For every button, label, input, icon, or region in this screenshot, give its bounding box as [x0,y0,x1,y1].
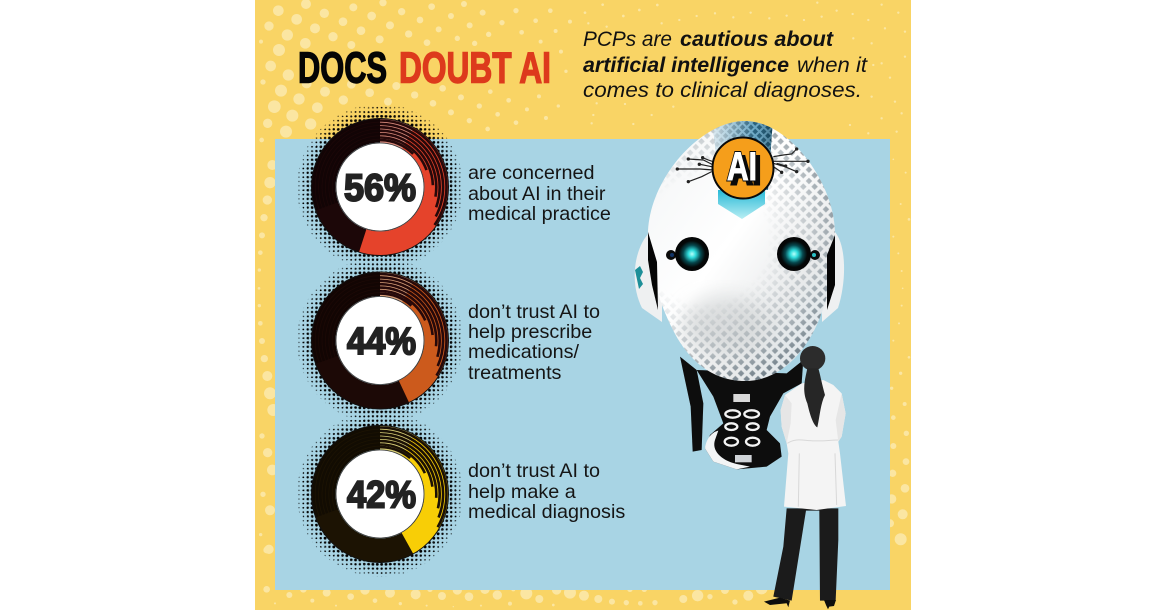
donut chart: 56%: 56% [344,168,416,210]
icon: AI circuit badge [676,138,810,198]
donut chart: 42% [295,409,465,579]
donut chart: 44% [295,255,465,426]
caption: 44%: medications/ [468,341,580,363]
caption: 56%: about AI in their [468,183,606,205]
icon: AI circuit badge: AI [731,149,761,193]
blue content panel [275,139,890,590]
illustration: robot head [640,115,840,385]
subtitle text block: when it [797,53,868,77]
subtitle text block: PCPs are [583,27,672,51]
icon: blue forehead stripe [712,118,773,190]
title: DOCS [298,44,387,92]
caption: 42%: medical diagnosis [468,501,625,523]
subtitle text block: cautious about [680,27,834,51]
caption: 56%: medical practice [468,203,611,225]
caption: 44%: treatments [468,362,562,384]
title: DOUBT AI [399,44,551,92]
donut chart: 44%: 44% [347,321,416,363]
icon: robot eyes [666,237,820,271]
caption: 44%: don’t trust AI to [468,301,600,323]
caption: 42%: don’t trust AI to [468,460,600,482]
title [298,44,551,92]
caption: 44%: help prescribe [468,321,592,343]
illustration: robot ears [635,230,844,322]
illustration: doctor seen from behind [764,346,846,609]
illustration: robot neck [680,357,803,469]
icon: AI circuit badge: AI [727,145,757,189]
donut chart: 42%: 42% [347,474,416,516]
background panel: yellow dotted page [255,0,911,610]
caption: 56%: are concerned [468,162,594,184]
subtitle text block [583,27,868,102]
subtitle text block: comes to clinical diagnoses. [583,78,862,102]
icon: AI circuit badge: AI [727,145,757,189]
subtitle text block: artificial intelligence [583,53,789,77]
donut chart: 56% [295,102,465,272]
caption: 42%: help make a [468,481,576,503]
